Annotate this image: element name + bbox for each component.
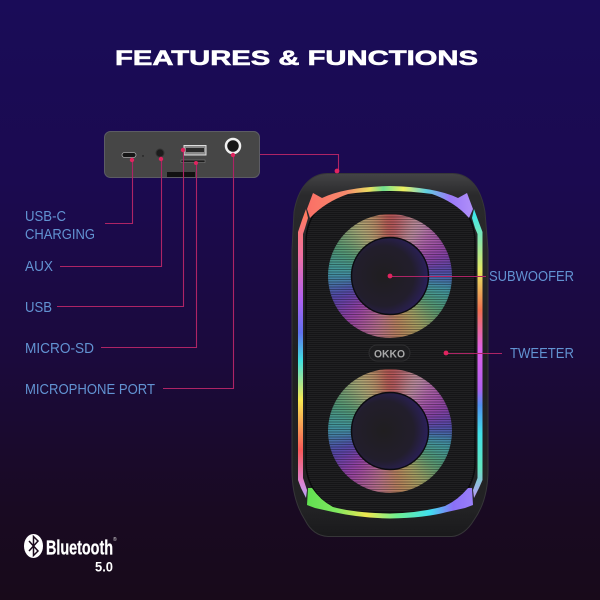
OKKO logo: OKKO (374, 348, 405, 360)
icon: micro-SD slot (181, 160, 205, 162)
label: subwoofer: SUBWOOFER (489, 268, 574, 285)
label: USB-C charging: USB-C (25, 208, 66, 225)
lower woofer cone (352, 392, 428, 470)
title: FEATURES & FUNCTIONS (115, 47, 478, 70)
Bluetooth logo: 5.0 (95, 558, 113, 574)
LED strip (298, 186, 482, 518)
OKKO logo (369, 345, 410, 361)
labels (25, 208, 574, 398)
label: Micro-SD: MICRO-SD (25, 340, 94, 357)
icon: Bluetooth rune (24, 534, 43, 558)
upper woofer cone (352, 238, 428, 314)
speaker illustration (292, 173, 488, 537)
icon: USB port (184, 146, 206, 155)
speaker body (292, 174, 488, 536)
label: AUX: AUX (25, 258, 53, 275)
label: charging: CHARGING (25, 226, 95, 243)
callout dots (130, 148, 448, 355)
label: USB: USB (25, 299, 52, 316)
label: microphone port: MICROPHONE PORT (25, 381, 155, 398)
port panel (104, 132, 260, 178)
lower subwoofer ring (328, 369, 452, 493)
icon: USB-C port (122, 152, 136, 158)
Bluetooth logo: Bluetooth (46, 538, 113, 560)
icon: AUX jack (156, 149, 164, 157)
callout lines (57, 150, 502, 388)
Bluetooth logo: ® (113, 536, 117, 543)
icon: microphone port (226, 139, 240, 153)
label: tweeter: TWEETER (510, 345, 574, 362)
upper subwoofer ring (328, 214, 452, 338)
Bluetooth logo (24, 534, 117, 574)
grille (306, 191, 475, 513)
